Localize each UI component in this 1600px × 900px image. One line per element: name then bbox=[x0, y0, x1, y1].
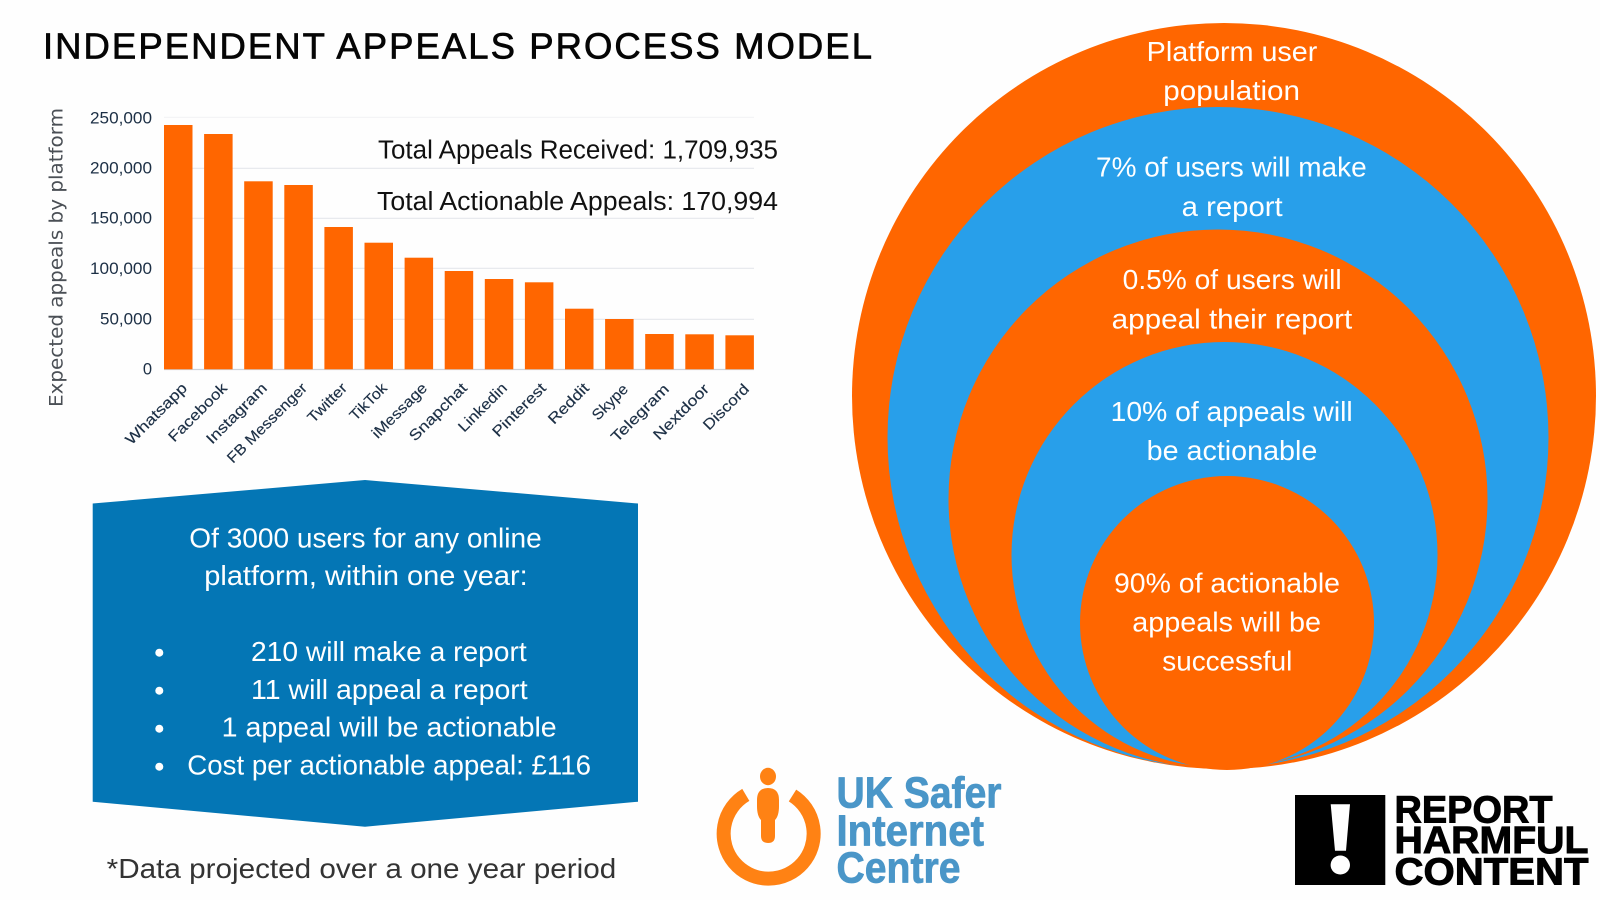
circle: 0.5% of users appeal: 0.5% of users will bbox=[1123, 264, 1342, 295]
summary heading bbox=[189, 522, 542, 591]
circle: 0.5% of users appeal: appeal their report bbox=[1112, 303, 1353, 334]
circle: 90% of actionable appeals successful: successful bbox=[1162, 646, 1292, 677]
circle: platform user population: population bbox=[1163, 75, 1300, 106]
totals callout: Total Actionable Appeals: 170,994 bbox=[377, 188, 778, 216]
x axis platform labels: Twitter bbox=[304, 380, 351, 426]
logo wordmark: Internet bbox=[836, 806, 984, 856]
x axis platform labels: Reddit bbox=[545, 379, 594, 428]
circle: 10% of appeals actionable bbox=[1012, 342, 1438, 768]
summary bullet list bbox=[155, 636, 591, 781]
x axis platform labels: FB Messenger bbox=[224, 380, 311, 467]
logo wordmark: UK Safer bbox=[836, 768, 1002, 818]
x axis platform labels: iMessage bbox=[369, 380, 431, 442]
circle: 0.5% of users appeal bbox=[948, 230, 1488, 768]
nested circles funnel bbox=[852, 23, 1596, 770]
circle: 10% of appeals actionable: be actionable bbox=[1147, 435, 1317, 466]
icon: power symbol person bbox=[724, 768, 814, 879]
circle: 90% of actionable appeals successful: 90% of actionable bbox=[1114, 568, 1340, 599]
y axis labels: 200,000 bbox=[90, 160, 152, 178]
x axis platform labels: Telegram bbox=[608, 381, 673, 446]
y axis title: Expected appeals by platform bbox=[46, 108, 68, 407]
circle: 7% of users report: a report bbox=[1182, 191, 1283, 222]
bars bbox=[164, 125, 754, 369]
summary bullet list: 1 appeal will be actionable bbox=[222, 712, 557, 743]
x axis platform labels: Facebook bbox=[165, 379, 231, 446]
logo wordmark: CONTENT bbox=[1394, 851, 1588, 893]
panel: of 3000 users summary bbox=[93, 480, 638, 827]
x axis platform labels: Instagram bbox=[203, 380, 271, 448]
circle: 90% of actionable appeals successful bbox=[1080, 476, 1374, 770]
logo wordmark bbox=[1394, 790, 1588, 893]
summary bullet list: Cost per actionable appeal: £116 bbox=[187, 750, 591, 781]
circle: platform user population: Platform user bbox=[1147, 36, 1317, 67]
footnote: *Data projected over a one year period bbox=[107, 853, 616, 884]
logo wordmark: Centre bbox=[836, 844, 960, 892]
title: INDEPENDENT APPEALS PROCESS MODEL bbox=[43, 25, 872, 66]
y axis labels: 250,000 bbox=[90, 110, 152, 128]
totals callout bbox=[377, 136, 778, 216]
circle: 7% of users report bbox=[888, 107, 1548, 768]
circle: 10% of appeals actionable: 10% of appeals will bbox=[1111, 396, 1353, 427]
circle: 90% of actionable appeals successful: appeals will be bbox=[1132, 607, 1321, 638]
x axis platform labels: Whatsapp bbox=[122, 380, 191, 448]
totals callout: Total Appeals Received: 1,709,935 bbox=[378, 136, 778, 164]
summary bullet list: 11 will appeal a report bbox=[251, 674, 528, 705]
x axis platform labels: Skype bbox=[589, 381, 632, 424]
circle: 7% of users report: 7% of users will make bbox=[1096, 152, 1367, 183]
x axis platform labels: Pinterest bbox=[489, 379, 551, 441]
circle: platform user population bbox=[852, 23, 1596, 769]
y axis labels bbox=[90, 110, 152, 378]
summary bullet list: 210 will make a report bbox=[251, 636, 527, 667]
icon: exclamation mark bbox=[1295, 795, 1385, 885]
logo: Report Harmful Content bbox=[1295, 790, 1588, 893]
y axis labels: 150,000 bbox=[90, 210, 152, 228]
x axis platform labels: Nextdoor bbox=[650, 381, 713, 444]
y axis labels: 100,000 bbox=[90, 260, 152, 278]
x axis platform labels: Snapchat bbox=[406, 379, 472, 445]
logo: UK Safer Internet Centre bbox=[724, 768, 1002, 892]
x axis platform labels: Discord bbox=[700, 381, 753, 434]
y axis labels: 50,000 bbox=[100, 310, 152, 328]
x axis platform labels: TikTok bbox=[346, 379, 391, 424]
logo wordmark: HARMFUL bbox=[1394, 820, 1588, 862]
x axis platform labels bbox=[122, 379, 753, 467]
x axis platform labels: Linkedin bbox=[455, 380, 511, 436]
logo wordmark bbox=[836, 768, 1002, 892]
summary heading: platform, within one year: bbox=[204, 560, 528, 591]
summary heading: Of 3000 users for any online bbox=[189, 522, 542, 553]
logo wordmark: REPORT bbox=[1394, 790, 1552, 832]
y axis labels: 0 bbox=[143, 360, 152, 378]
bar chart: expected appeals by platform bbox=[46, 108, 778, 467]
